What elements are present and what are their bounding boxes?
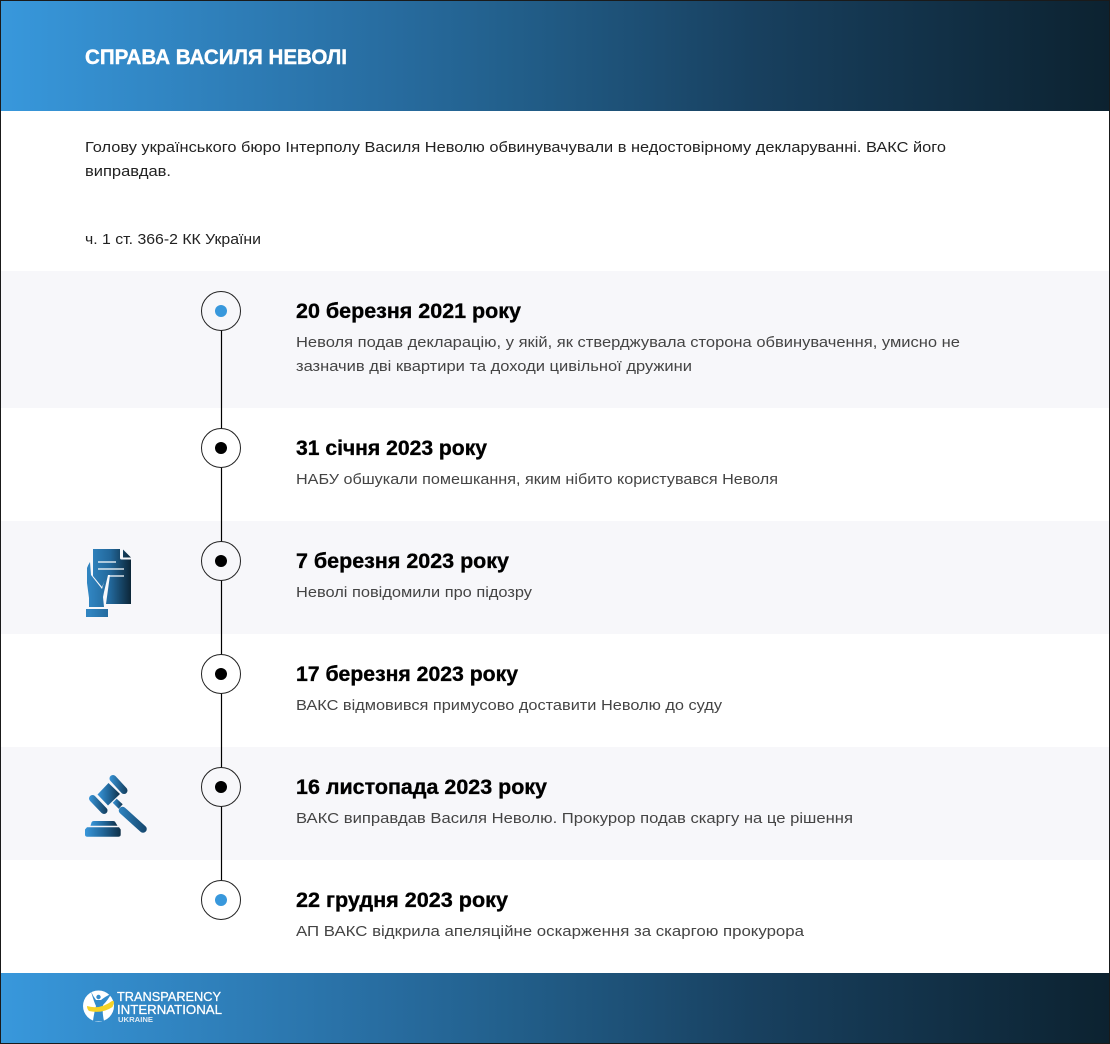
icon: judge gavel bbox=[85, 778, 143, 837]
legal article reference: ч. 1 ст. 366-2 КК України bbox=[85, 231, 261, 248]
timeline event: 7 March 2023 bbox=[202, 542, 533, 601]
timeline event: 16 November 2023 bbox=[202, 768, 853, 827]
timeline event: 7 March 2023: Неволі повідомили про підозру bbox=[296, 584, 533, 601]
logo: Transparency International Ukraine: INTERNATIONAL bbox=[117, 1003, 222, 1017]
timeline event: 31 January 2023: НАБУ обшукали помешкання, яким нібито користувався Неволя bbox=[296, 471, 778, 488]
timeline event: 22 December 2023: АП ВАКС відкрила апеляційне оскарження за скаргою прокурора bbox=[296, 923, 805, 940]
logo: Transparency International Ukraine: TRANSPARENCY bbox=[117, 990, 222, 1004]
intro text: Голову українського бюро Інтерполу Василя Неволю обвинувачували в недостовірному декларуванні. ВАКС його bbox=[85, 139, 946, 156]
timeline event: 22 December 2023: 22 грудня 2023 року bbox=[296, 889, 508, 912]
logo: Transparency International Ukraine bbox=[83, 990, 222, 1024]
band: 20 March 2021 row bbox=[0, 271, 1110, 408]
band: 16 November 2023 row bbox=[0, 747, 1110, 860]
intro text: виправдав. bbox=[85, 163, 171, 180]
logo: Transparency International Ukraine: UKRAINE bbox=[118, 1017, 153, 1024]
timeline event: 31 January 2023 bbox=[202, 428, 778, 488]
timeline event: 20 March 2021: зазначив дві квартири та доходи цивільної дружини bbox=[296, 358, 692, 375]
timeline event: 20 March 2021: Неволя подав декларацію, у якій, як стверджувала сторона обвинувачення, умисно не bbox=[296, 334, 960, 351]
band: 7 March 2023 row bbox=[0, 521, 1110, 634]
timeline event: 31 January 2023: 31 січня 2023 року bbox=[296, 437, 487, 460]
header bar bbox=[0, 0, 1110, 111]
title: СПРАВА ВАСИЛЯ НЕВОЛІ bbox=[85, 46, 347, 69]
timeline event: 17 March 2023: 17 березня 2023 року bbox=[296, 663, 518, 686]
timeline line bbox=[220, 320, 222, 890]
timeline event: 7 March 2023: 7 березня 2023 року bbox=[296, 550, 509, 573]
timeline event: 16 November 2023: ВАКС виправдав Василя Неволю. Прокурор подав скаргу на це рішення bbox=[296, 810, 853, 827]
timeline event: 17 March 2023 bbox=[202, 654, 723, 714]
timeline event: 17 March 2023: ВАКС відмовився примусово доставити Неволю до суду bbox=[296, 697, 723, 714]
timeline event: 16 November 2023: 16 листопада 2023 року bbox=[296, 776, 547, 799]
icon: hand holding document bbox=[86, 549, 131, 617]
footer bar bbox=[0, 973, 1110, 1044]
timeline event: 22 December 2023 bbox=[202, 880, 805, 940]
timeline event: 20 March 2021 bbox=[202, 292, 960, 375]
timeline event: 20 March 2021: 20 березня 2021 року bbox=[296, 300, 521, 323]
intro text bbox=[85, 139, 946, 180]
